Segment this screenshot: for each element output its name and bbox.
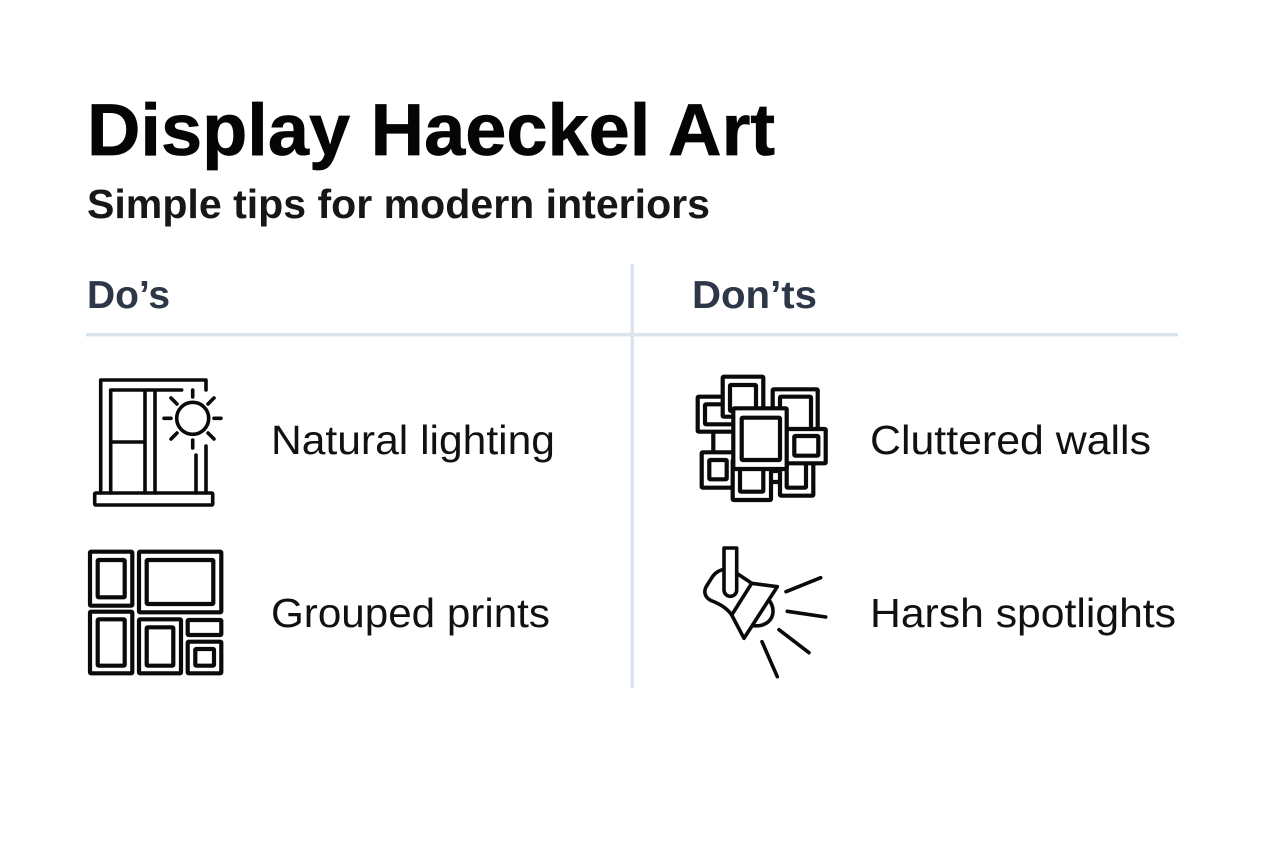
label: natural lighting: Natural lighting <box>271 417 555 463</box>
label: harsh spotlights: Harsh spotlights <box>870 590 1176 636</box>
column heading: don'ts: Don’ts <box>692 274 817 317</box>
label: grouped prints: Grouped prints <box>271 590 550 636</box>
title: Display Haeckel Art <box>87 90 775 171</box>
column heading: do's: Do’s <box>87 274 170 317</box>
icon: grouped prints <box>90 552 221 673</box>
column divider <box>630 264 634 688</box>
label: cluttered walls: Cluttered walls <box>870 417 1151 463</box>
header rule <box>86 333 1178 336</box>
icon: harsh spotlight <box>705 548 826 677</box>
icon: window with sun <box>95 380 221 505</box>
icon: cluttered frames <box>698 377 826 500</box>
subtitle: Simple tips for modern interiors <box>87 181 710 227</box>
